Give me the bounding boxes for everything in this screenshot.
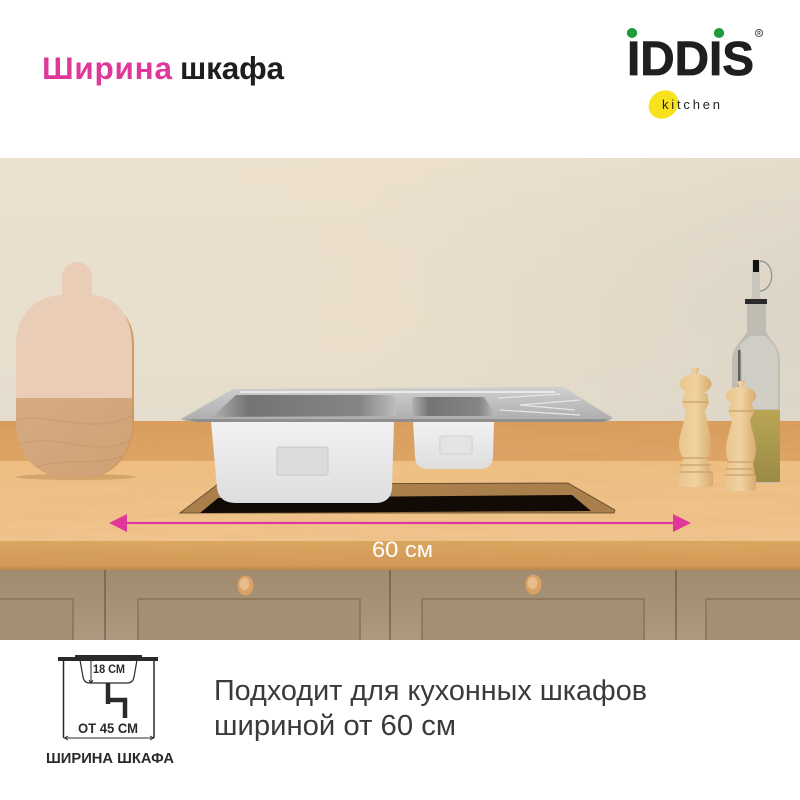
drain [108,683,125,718]
cabinet doors [0,570,800,640]
height arrow [89,658,93,683]
knob right [526,574,542,594]
knob left [238,576,254,596]
logo: IDDIS kitchen: kitchen [662,97,720,112]
pepper mill large [678,368,713,487]
oil bottle [732,260,780,483]
title [42,50,284,86]
sink [181,387,613,503]
small bowl opening [412,397,496,416]
large bowl opening [212,395,396,417]
cutout in countertop [180,483,615,513]
description text: Подходит для кухонных шкафов [214,675,647,707]
panel: kitchen photo scene [0,158,800,649]
cabinet walls [64,661,154,738]
countertop line [58,657,158,661]
logo: IDDIS kitchen: IDDIS [627,33,754,86]
logo: IDDIS kitchen: R [757,31,761,37]
cutting board [16,262,136,480]
width dimension line [64,736,154,740]
pepper mill small [725,381,756,491]
title: шкафа [180,50,284,86]
top plate [181,387,613,421]
height label: 18 СМ [93,662,125,676]
description text [214,675,647,742]
small bowl underside [413,420,494,469]
large bowl label [277,447,328,475]
description text: шириной от 60 см [214,710,456,742]
width label: 60 см [372,537,433,562]
width arrow [109,514,691,532]
sink and cabinet diagram [46,655,174,767]
title: Ширина [42,50,172,86]
wall [0,158,800,422]
sink lip [75,655,142,658]
wooden countertop [0,421,800,570]
small bowl label [440,436,472,454]
drainboard ribs [498,394,580,415]
sink bowl [80,660,137,683]
caption: ШИРИНА ШКАФА [46,750,174,767]
large bowl underside [211,421,394,503]
cabinet width label: ОТ 45 СМ [78,721,138,736]
logo: IDDIS kitchen [627,28,763,124]
